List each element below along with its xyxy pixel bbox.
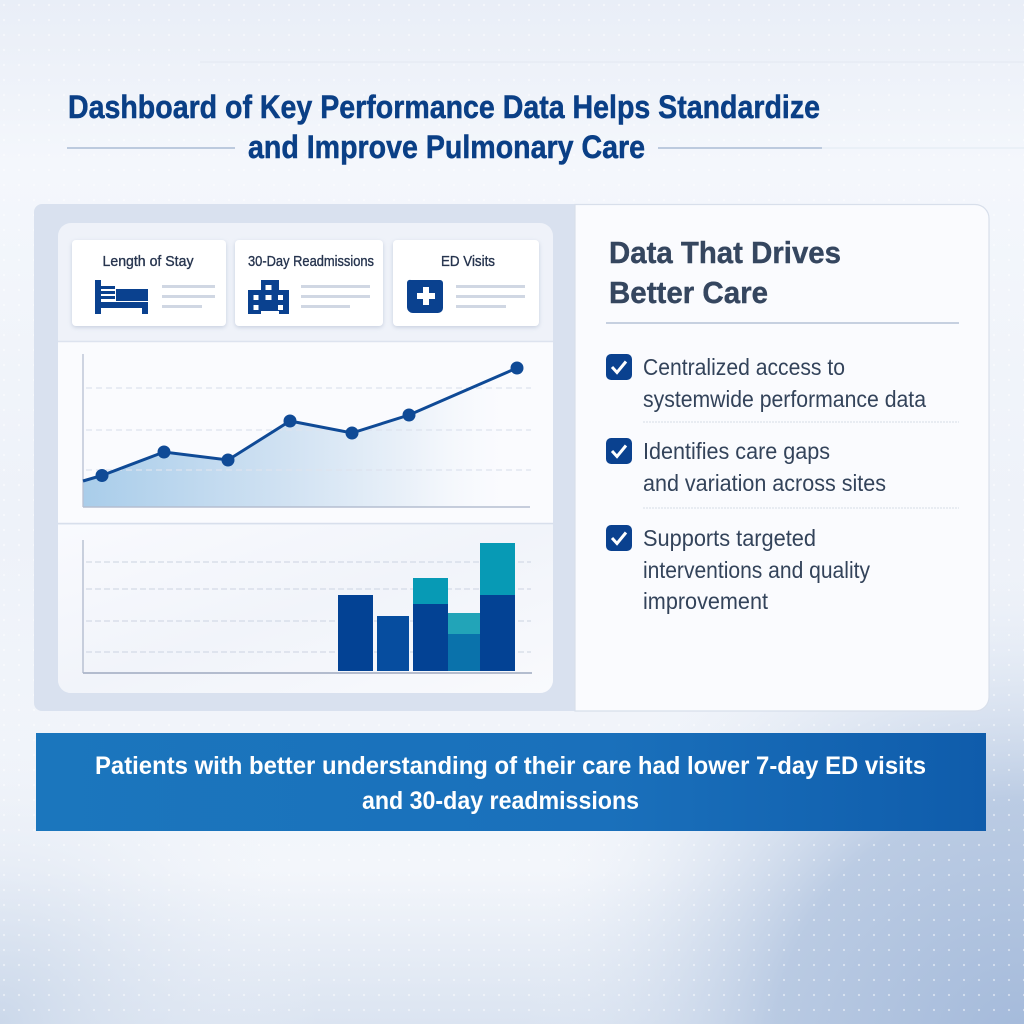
metric card: ED visits: ED Visits: [441, 254, 495, 270]
panel: data that drives better care: [575, 204, 989, 711]
bullet: identifies care gaps: [606, 438, 886, 496]
metric card: 30-day readmissions: 30-Day Readmissions: [248, 254, 374, 270]
bullet: supports targeted interventions: improvement: [643, 588, 769, 614]
title: and Improve Pulmonary Care: [248, 129, 645, 165]
icon: medical cross: [407, 280, 443, 313]
callout banner: Patients with better understanding of their care had lower 7-day ED visits: [95, 752, 926, 780]
metric card: ED visits: [393, 240, 539, 326]
panel: dashboard: [34, 204, 576, 711]
callout banner: [36, 733, 986, 831]
bullet: centralized access: [606, 354, 926, 412]
callout banner: and 30-day readmissions: [362, 787, 639, 815]
bullet: supports targeted interventions: [606, 525, 870, 614]
metric card: length of stay: [72, 240, 226, 326]
bullet: identifies care gaps: and variation across sites: [643, 470, 886, 496]
metric card: 30-day readmissions: [235, 240, 383, 326]
bullet: centralized access: Centralized access to: [643, 354, 845, 380]
bullet: identifies care gaps: Identifies care gaps: [643, 438, 830, 464]
icon: bed: [95, 280, 148, 314]
line chart: [58, 342, 553, 524]
bullet: centralized access: systemwide performance data: [643, 386, 926, 412]
bar chart: [58, 525, 553, 693]
bullet: supports targeted interventions: interventions and quality: [643, 557, 870, 583]
metric card: length of stay: Length of Stay: [102, 254, 194, 270]
title: [67, 89, 822, 165]
bullet: supports targeted interventions: Supports targeted: [643, 525, 816, 551]
title: Dashboard of Key Performance Data Helps Standardize: [68, 89, 820, 125]
panel heading: Data That Drives: [609, 235, 841, 270]
panel heading: [609, 235, 841, 310]
panel heading: Better Care: [609, 275, 768, 310]
icon: hospital building: [248, 280, 289, 314]
